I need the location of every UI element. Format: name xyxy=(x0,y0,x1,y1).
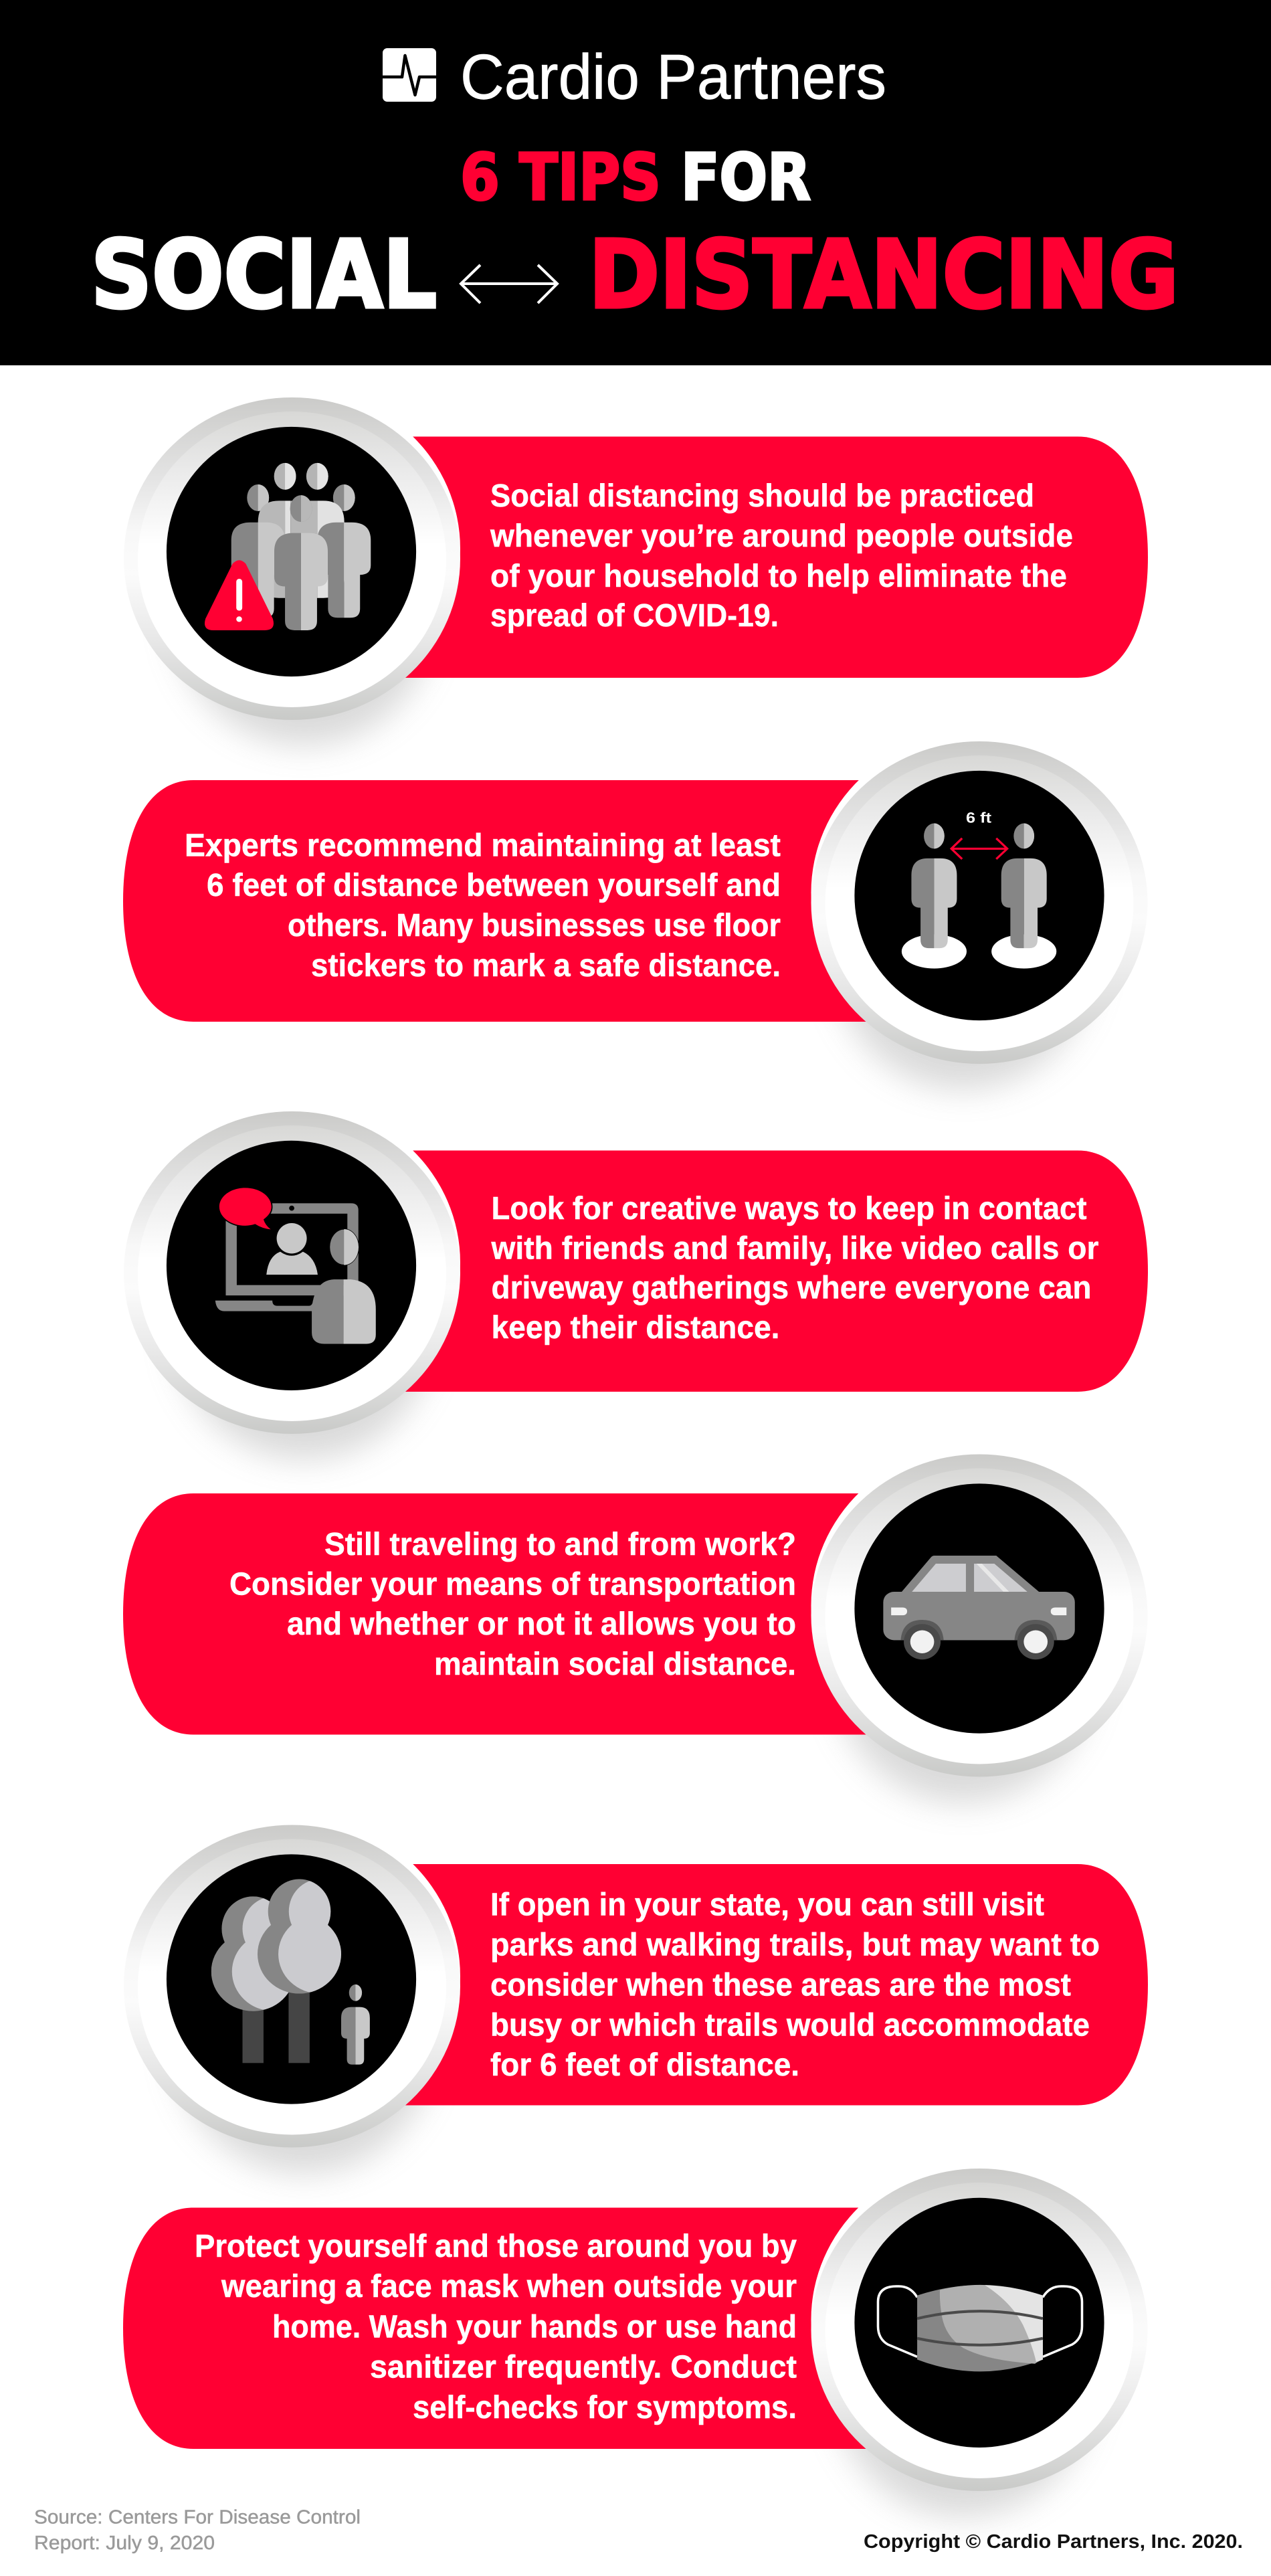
tip text: self-checks for symptoms. xyxy=(413,2390,797,2425)
tip text: of your household to help eliminate the xyxy=(490,559,1067,594)
red bar xyxy=(301,1151,1148,1392)
tip text xyxy=(195,2229,797,2425)
tip text: sanitizer frequently. Conduct xyxy=(370,2350,797,2385)
icon: crowd with warning xyxy=(205,463,371,630)
tip text: home. Wash your hands or use hand xyxy=(272,2310,797,2344)
tip text: If open in your state, you can still visit xyxy=(490,1887,1044,1923)
tip text: for 6 feet of distance. xyxy=(490,2047,799,2083)
badge ring xyxy=(124,387,460,720)
tip 2 panel xyxy=(123,731,1148,1089)
shadow xyxy=(833,822,1094,1089)
tip 6 panel xyxy=(123,2158,1148,2516)
source note xyxy=(34,2506,361,2554)
red bar xyxy=(301,1864,1148,2105)
tip text: Still traveling to and from work? xyxy=(324,1527,796,1562)
red bar xyxy=(123,2208,990,2449)
icon: car xyxy=(883,1556,1075,1659)
tip 5 panel xyxy=(124,1815,1148,2173)
title line 1: FOR xyxy=(681,140,811,215)
tip text: Protect yourself and those around you by xyxy=(195,2229,797,2264)
icon: two people six feet apart xyxy=(902,824,1056,968)
red bar xyxy=(123,1493,990,1734)
tip text: wearing a face mask when outside your xyxy=(221,2269,797,2304)
tip text: Experts recommend maintaining at least xyxy=(185,828,781,863)
tip text xyxy=(490,1887,1100,2083)
tip text: stickers to mark a safe distance. xyxy=(311,948,781,984)
tip text: busy or which trails would accommodate xyxy=(490,2007,1090,2043)
title line 2: DISTANCING xyxy=(589,221,1179,330)
tip text xyxy=(490,478,1073,634)
tip text: parks and walking trails, but may want to xyxy=(490,1927,1100,1963)
red bar xyxy=(301,436,1148,678)
copyright: Copyright © Cardio Partners, Inc. 2020. xyxy=(864,2531,1243,2553)
shadow xyxy=(833,1535,1094,1803)
tip text: Consider your means of transportation xyxy=(229,1567,796,1602)
title line 2 xyxy=(91,221,1179,330)
red bar xyxy=(123,780,990,1022)
tip text: Look for creative ways to keep in contact xyxy=(491,1191,1087,1226)
tip text: consider when these areas are the most xyxy=(490,1967,1071,2003)
tip text: driveway gatherings where everyone can xyxy=(491,1270,1092,1306)
shadow xyxy=(174,478,435,745)
title line 1 xyxy=(460,140,811,215)
distance label: 6 ft xyxy=(966,810,992,826)
icon: trees and walker xyxy=(203,1873,370,2065)
icon: video call on laptop xyxy=(215,1188,376,1344)
tip text xyxy=(229,1527,796,1682)
tip text: Social distancing should be practiced xyxy=(490,478,1034,514)
logo icon xyxy=(383,48,436,102)
tip text xyxy=(185,828,781,984)
badge ring xyxy=(811,1444,1148,1777)
shadow xyxy=(833,2249,1094,2516)
tip text: whenever you’re around people outside xyxy=(490,519,1073,554)
shadow xyxy=(174,1192,435,1459)
tip text: spread of COVID-19. xyxy=(490,598,779,634)
logo wordmark: Cardio Partners xyxy=(460,41,886,112)
tip 4 panel xyxy=(123,1444,1148,1803)
tip text: keep their distance. xyxy=(491,1310,780,1346)
source note: Report: July 9, 2020 xyxy=(34,2533,215,2554)
tip text xyxy=(491,1191,1098,1346)
tip text: with friends and family, like video calls or xyxy=(491,1231,1098,1266)
badge ring xyxy=(124,1101,460,1434)
source note: Source: Centers For Disease Control xyxy=(34,2506,361,2528)
header band xyxy=(0,0,1271,365)
title line 1: 6 TIPS xyxy=(460,140,661,215)
tip 1 panel xyxy=(124,387,1148,745)
badge ring xyxy=(811,731,1148,1064)
badge ring xyxy=(811,2158,1148,2491)
icon: face mask xyxy=(878,2285,1082,2371)
tip text: 6 feet of distance between yourself and xyxy=(207,868,781,903)
badge ring xyxy=(124,1815,460,2148)
title line 2: SOCIAL xyxy=(91,221,437,330)
tip text: and whether or not it allows you to xyxy=(287,1606,796,1642)
double arrow xyxy=(461,265,557,303)
tip 3 panel xyxy=(124,1101,1148,1459)
tip text: others. Many businesses use floor xyxy=(288,908,781,943)
shadow xyxy=(174,1906,435,2173)
tip text: maintain social distance. xyxy=(434,1647,796,1682)
